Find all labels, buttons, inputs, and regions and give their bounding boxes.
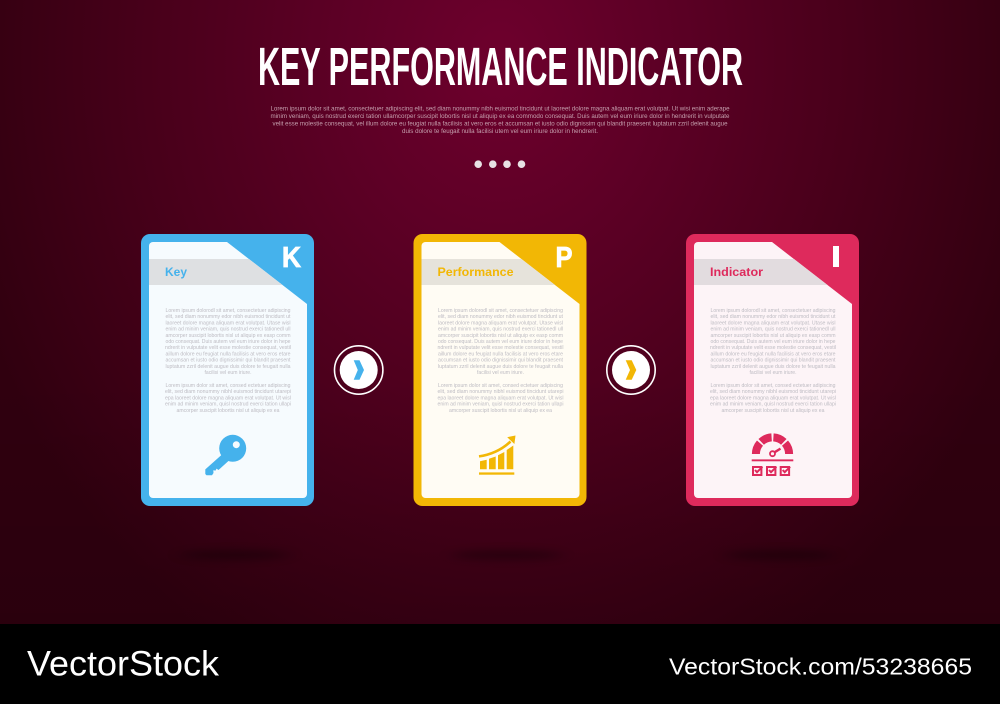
label: Indicator: Indicator: [710, 267, 764, 279]
card body text: elit, sed diam nonummy edor nibh euismod tincidunt ut: [166, 314, 291, 320]
card body text: epa laoreet dolore magna aliquam erat volutpat. Ut wisl: [165, 395, 291, 401]
letter P: P: [556, 242, 572, 274]
card body text: ndrerit in vulputate velit esse molestie consequat, vestil: [710, 345, 836, 351]
card body text: Lorem ipsum dolorodl sit amet, consectetuer adipiscing: [166, 308, 290, 314]
card body text: elit, sed diam nonummy nibhl euismod tincidunt utarepi: [438, 389, 564, 395]
card body text: laoreet dolore magna aliquam erat volutpat. Utase wisl: [710, 320, 836, 326]
card body text: elit, sed diam nonummy edor nibh euismod tincidunt ut: [710, 314, 836, 320]
card body text: facilisi vel eum iriure.: [477, 370, 524, 376]
label band: [149, 259, 282, 285]
card body text: laoreet dolore magna aliquam erat volutpat. Utase wisl: [166, 320, 290, 326]
footer image id: VectorStock.com/53238665: [669, 654, 972, 680]
intro text block: Lorem ipsum dolor sit amet, consectetuer adipiscing elit, sed diam nonummy nibh euismod tincidunt ut laoreet dolore magna aliquam erat volutpat. Ut wisi enim aderape: [270, 106, 730, 112]
panel: Key card: [141, 234, 314, 506]
intro text block: minim veniam, quis nostrud exerci tation ullamcorper suscipit lobortis nisl ut aliquip ex ea commodo consequat. Duis autem vel eum iriure dolor in hendrerit in vulputate: [270, 113, 730, 120]
panel: Performance card: [414, 234, 586, 506]
label band: [694, 259, 828, 285]
card body text: amcorper suscipit lobortis nisl ut aliquip ex ea: [449, 408, 553, 414]
card body text: accumsan et iusto odio dignissimir qui blandit praesent: [710, 358, 836, 364]
card body text: ndrerit in vulputate velit esse molestie consequat, vestil: [165, 345, 291, 351]
card sheet: [694, 242, 852, 498]
card body text: aillum dolore eu feugiat nulla facilisis at vero eros etare: [710, 351, 836, 357]
card body text: Lorem ipsum dolorodl sit amet, consectetuer adipiscing: [710, 308, 836, 314]
card frame: [141, 234, 314, 506]
card body text: Lorem ipsum dolor sit amet, consed ectetuer adipiscing: [438, 383, 563, 389]
card body text: enim ad minim veniam, quis nostrud exerci tationedl ull: [438, 327, 563, 333]
card body text: elit, sed diam nonummy nibhl euismod tincidunt utarepi: [165, 389, 291, 395]
label: Performance: Performance: [438, 267, 514, 279]
card body text: [710, 308, 836, 414]
card body text: amcorper suscipit lobortis nisl ut aliquip ex easp comm: [166, 333, 291, 339]
card body text: facilisi vel eum iriure.: [750, 370, 797, 376]
card frame: [686, 234, 859, 506]
card body text: [438, 308, 564, 414]
icon: gauge with checkboxes: [752, 437, 793, 475]
card body text: [165, 308, 291, 414]
pagination dots: [474, 160, 525, 168]
card body text: enim ad minim veniam, quis nostrud exerci tationedl ull: [166, 327, 290, 333]
card body text: luptatum zzril delenit augue duis dolore te feugait nulla: [166, 364, 291, 370]
card body text: elit, sed diam nonummy edor nibh euismod tincidunt ut: [438, 314, 563, 320]
card body text: odo consequat. Duis autem vel eum iriure dolor in hepe: [710, 339, 836, 345]
footer bar: [0, 624, 1000, 704]
card body text: amcorper suscipit lobortis nisl ut aliquip ex easp comm: [438, 333, 563, 339]
card sheet: [422, 242, 580, 498]
card body text: amcorper suscipit lobortis nisl ut aliquip ex ea: [722, 408, 825, 414]
card body text: enim ad minim veniam, quis nostrud exerci tationedl ull: [710, 327, 836, 333]
card body text: odo consequat. Duis autem vel eum iriure dolor in hepe: [438, 339, 563, 345]
card body text: accumsan et iusto odio dignissimir qui blandit praesent: [438, 358, 563, 364]
card body text: epa laoreet dolore magna aliquam erat volutpat. Ut wisl: [710, 395, 836, 401]
letter I: [833, 246, 839, 267]
letter K: K: [282, 242, 301, 274]
icon: growth chart: [479, 436, 516, 475]
icon: key: [205, 435, 246, 475]
card body text: accumsan et iusto odio dignissimir qui blandit praesent: [166, 358, 291, 364]
card body text: luptatum zzril delenit augue duis dolore te feugait nulla: [438, 364, 564, 370]
card body text: Lorem ipsum dolorodl sit amet, consectetuer adipiscing: [438, 308, 563, 314]
card body text: amcorper suscipit lobortis nisl ut aliquip ex easp comm: [710, 333, 836, 339]
label: Key: Key: [165, 267, 188, 279]
panel: Indicator card: [686, 234, 859, 506]
footer brand: VectorStock: [27, 644, 220, 684]
card body text: odo consequat. Duis autem vel eum iriure dolor in hepe: [166, 339, 290, 345]
card body text: enim ad minim veniam, quisl nostrud exerci tation ullapi: [710, 402, 836, 408]
card body text: aillum dolore eu feugiat nulla facilisis at vero eros etare: [166, 351, 290, 357]
intro text block: [270, 106, 730, 135]
card body text: enim ad minim veniam, quisl nostrud exerci tation ullapi: [165, 402, 291, 408]
card body text: facilisi vel eum iriure.: [204, 370, 252, 376]
card sheet: [149, 242, 307, 498]
card body text: elit, sed diam nonummy nibhl euismod tincidunt utarepi: [710, 389, 836, 395]
card body text: laoreet dolore magna aliquam erat volutpat. Utase wisl: [438, 320, 563, 326]
intro text block: velit esse molestie consequat, vel illum dolore eu feugiat nulla facilisis at vero eros et accumsan et iusto odio dignissim qui blandit praesent luptatum zzril delenit augue: [272, 120, 728, 128]
arrow: performance to indicator: [607, 346, 655, 394]
card body text: enim ad minim veniam, quisl nostrud exerci tation ullapi: [438, 402, 564, 408]
label band: [422, 259, 555, 285]
card body text: epa laoreet dolore magna aliquam erat volutpat. Ut wisl: [438, 395, 564, 401]
card body text: amcorper suscipit lobortis nisl ut aliquip ex ea: [176, 408, 280, 414]
card frame: [414, 234, 586, 506]
card shadows: [180, 550, 835, 560]
card body text: ndrerit in vulputate velit esse molestie consequat, vestil: [438, 345, 564, 351]
intro text block: duis dolore te feugait nulla facilisi utem vel eum iriure dolor in hendrerit.: [402, 128, 598, 135]
card body text: Lorem ipsum dolor sit amet, consed ectetuer adipiscing: [166, 383, 290, 389]
card body text: aillum dolore eu feugiat nulla facilisis at vero eros etare: [438, 351, 563, 357]
arrow: key to performance: [334, 346, 383, 394]
card body text: luptatum zzril delenit augue duis dolore te feugait nulla: [710, 364, 836, 370]
card body text: Lorem ipsum dolor sit amet, consed ectetuer adipiscing: [710, 383, 836, 389]
